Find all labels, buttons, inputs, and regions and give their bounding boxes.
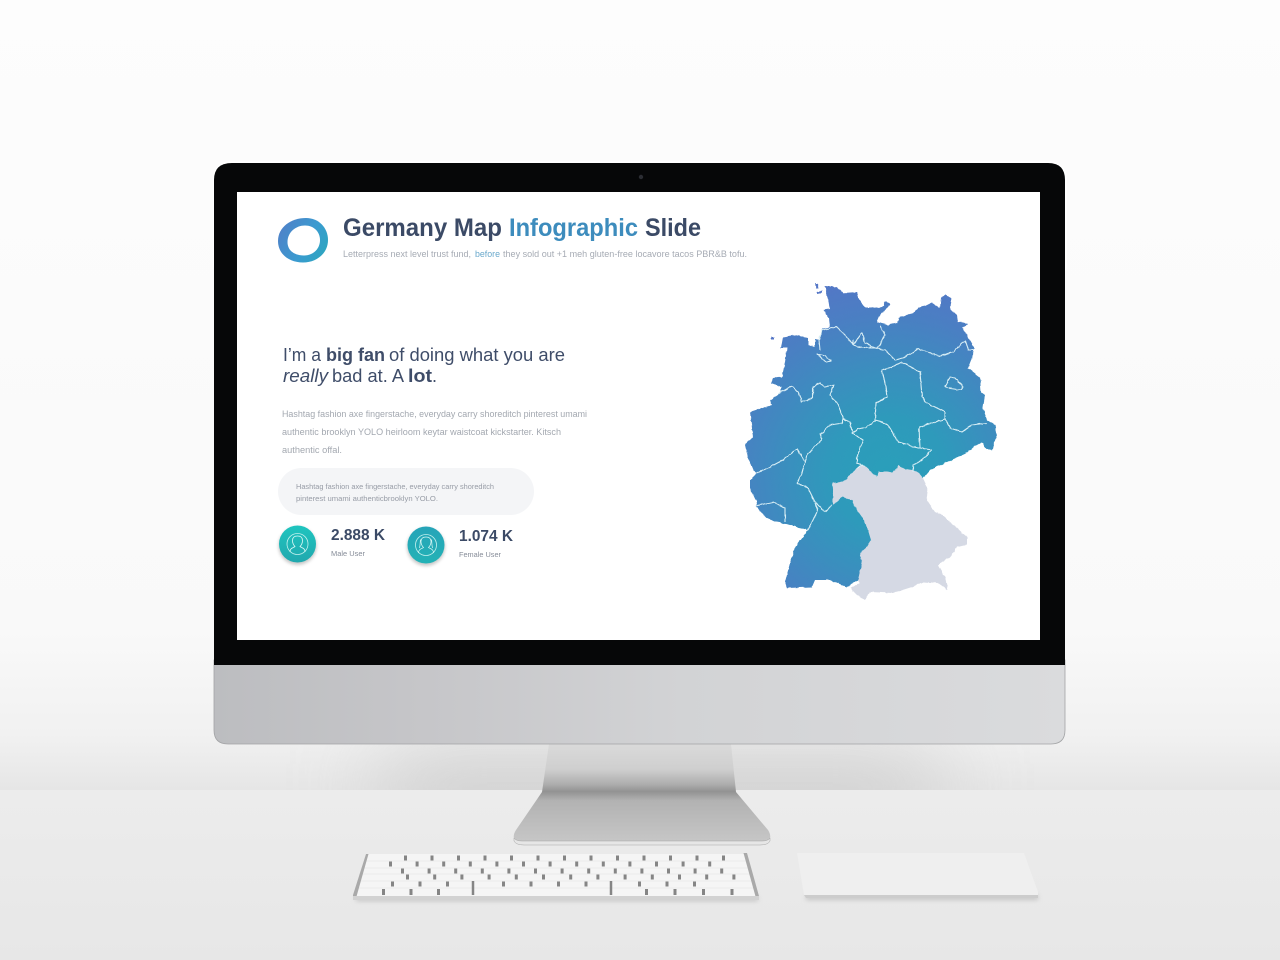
callout pill: pinterest umami authenticbrooklyn YOLO. <box>296 494 438 503</box>
white edge halo <box>213 161 1067 281</box>
state borders <box>755 325 987 530</box>
headline: . <box>432 366 437 386</box>
subtitle: they sold out +1 meh gluten-free locavore tacos PBR&B tofu. <box>503 249 747 259</box>
icon: male user <box>278 526 316 565</box>
body paragraph: authentic offal. <box>282 445 342 455</box>
subtitle: Letterpress next level trust fund, <box>343 249 471 259</box>
germany map <box>745 283 997 600</box>
monitor <box>213 161 1067 744</box>
headline: I’m a <box>283 345 322 365</box>
subtitle: before <box>475 249 500 259</box>
stat: male user: Male User <box>331 549 365 558</box>
stand base lip <box>514 838 770 845</box>
keyboard <box>353 853 759 901</box>
trackpad surface <box>797 853 1038 895</box>
trackpad lip <box>804 895 1038 898</box>
stat: female user: 1.074 K <box>459 528 513 545</box>
trackpad <box>797 853 1038 900</box>
headline: bad at. A <box>332 366 404 386</box>
callout pill: Hashtag fashion axe fingerstache, everyday carry shoreditch <box>296 482 494 491</box>
headline: lot <box>408 366 432 386</box>
headline <box>283 345 565 386</box>
callout pill <box>278 468 534 515</box>
keyboard body <box>353 854 759 900</box>
desk surface <box>0 790 1280 960</box>
slide screen <box>237 192 1040 640</box>
stand body <box>514 744 770 842</box>
title <box>343 214 701 242</box>
body paragraph: authentic brooklyn YOLO heirloom keytar waistcoat kickstarter. Kitsch <box>282 427 561 437</box>
stat: male user: 2.888 K <box>331 527 385 544</box>
monitor stand <box>514 744 770 845</box>
icon: female user <box>407 526 445 566</box>
logo ring <box>278 218 328 262</box>
headline: big fan <box>326 345 385 365</box>
keyboard edges <box>353 853 759 900</box>
key row separators <box>355 861 756 888</box>
monitor chin <box>214 660 1065 744</box>
trackpad shadow <box>806 895 1038 900</box>
webcam <box>639 175 643 179</box>
body paragraph <box>282 409 587 455</box>
regions: rest of germany <box>745 286 997 588</box>
headline: of doing what you are <box>389 345 565 365</box>
monitor shadow on wall <box>378 744 942 790</box>
title: Germany Map <box>343 214 502 242</box>
islands <box>771 283 822 339</box>
region: bavaria <box>832 465 967 600</box>
key gaps <box>382 858 736 895</box>
title: Infographic <box>509 214 638 242</box>
subtitle <box>343 249 747 259</box>
title: Slide <box>645 214 701 242</box>
keyboard shadow <box>356 897 758 901</box>
stat: female user <box>407 526 513 566</box>
stat: female user: Female User <box>459 550 501 559</box>
headline: really <box>283 366 329 386</box>
black bezel <box>214 163 1065 665</box>
body paragraph: Hashtag fashion axe fingerstache, everyday carry shoreditch pinterest umami <box>282 409 587 419</box>
stat: male user <box>278 526 385 565</box>
